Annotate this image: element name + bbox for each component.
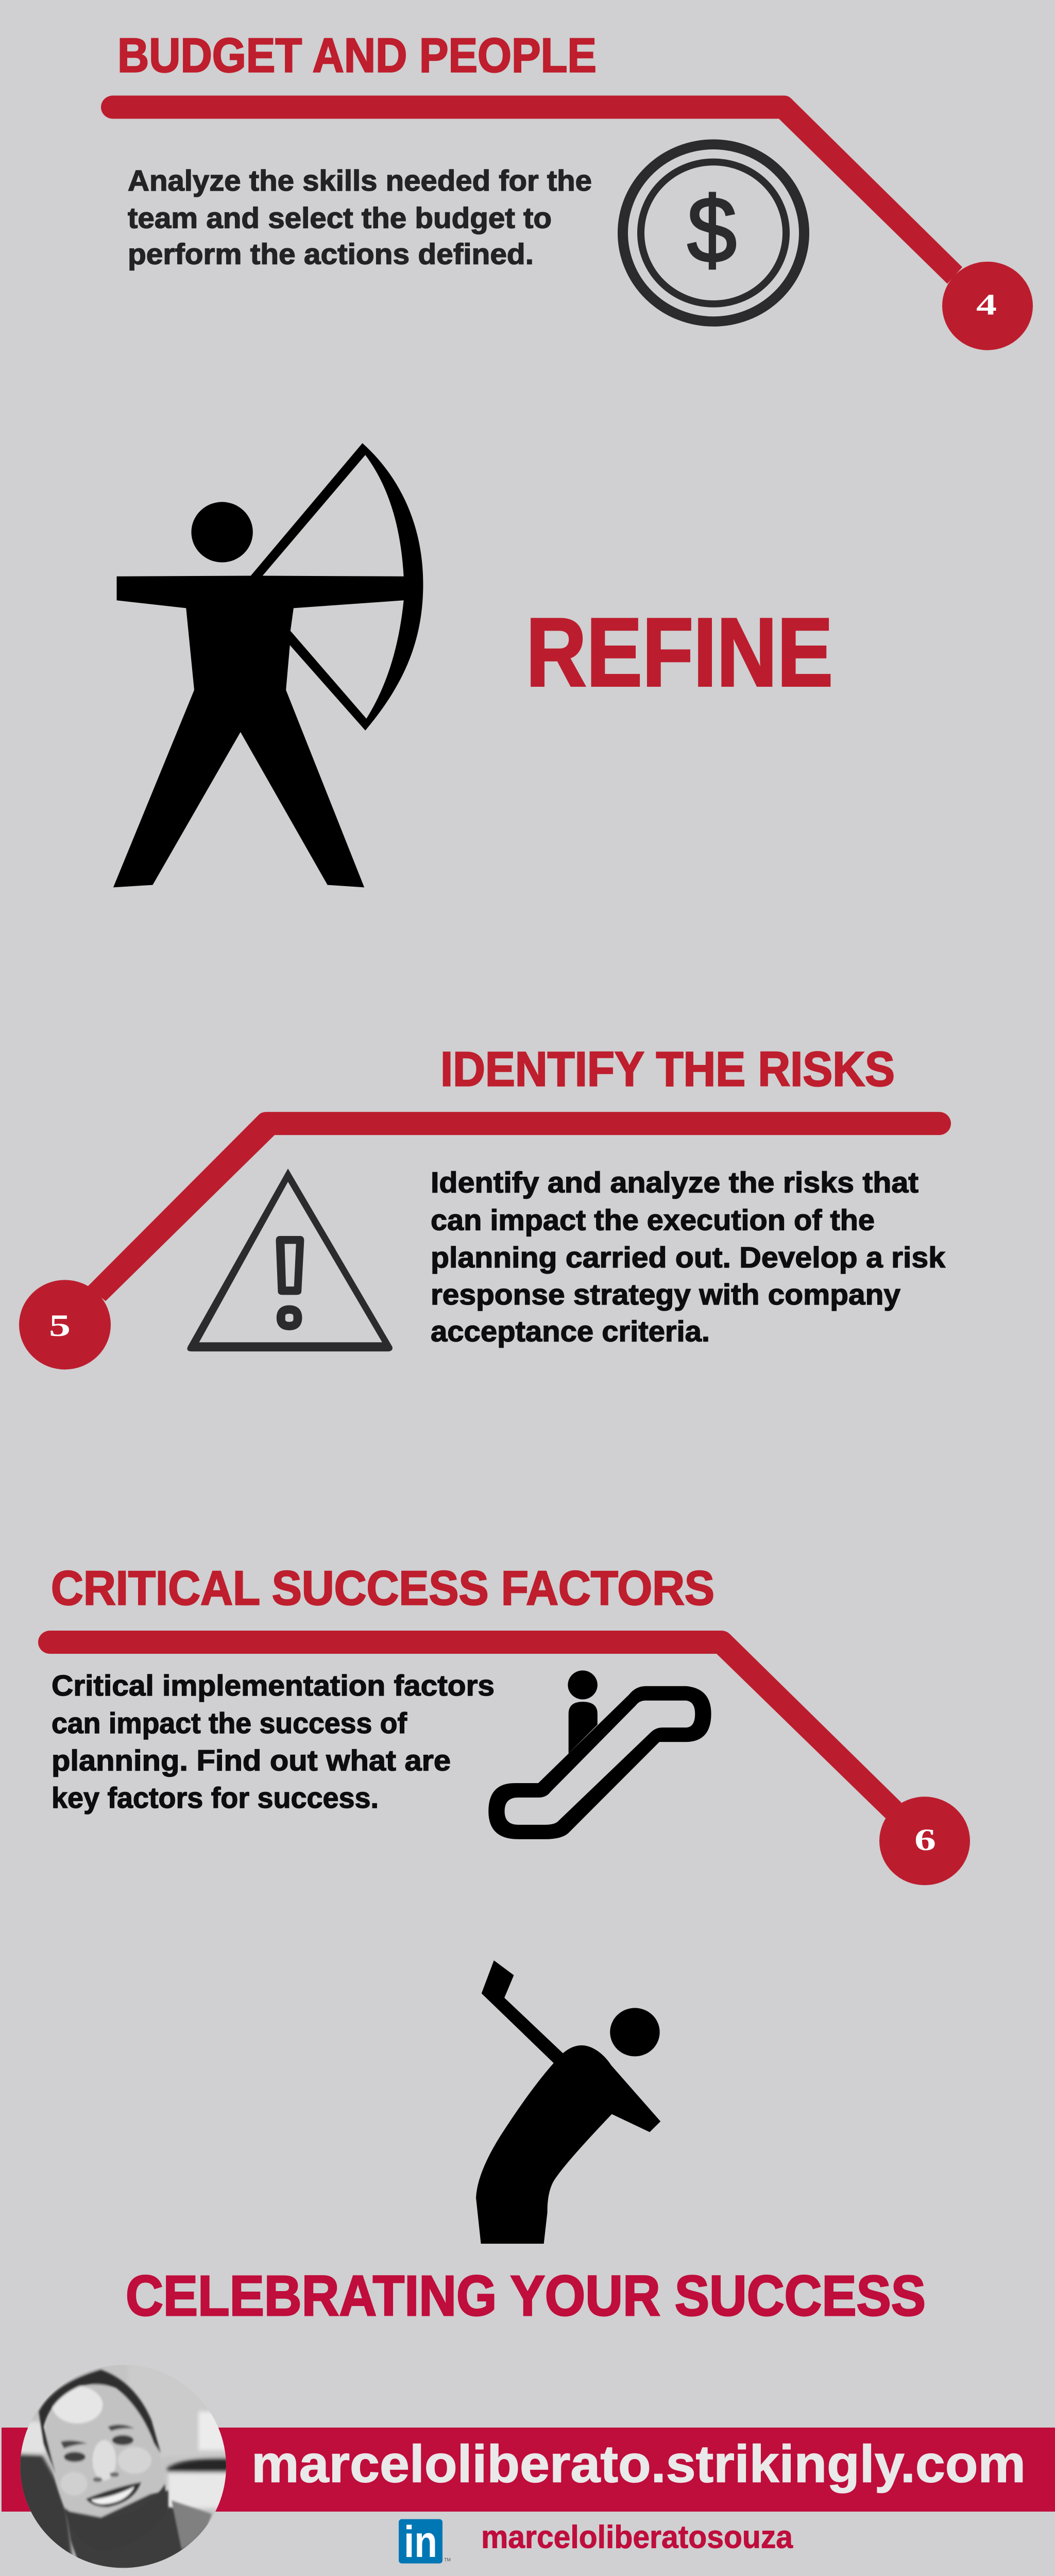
- portrait photo: [17, 2363, 232, 2571]
- body text: critical factors: planning. Find out what are: [52, 1744, 451, 1777]
- icon: person on escalator: [488, 1670, 711, 1839]
- icon: archer with bow: [113, 443, 423, 887]
- body text: critical factors: [52, 1670, 495, 1815]
- footer banner with website address: [2, 2428, 1055, 2512]
- heading: celebrating your success: CELEBRATING YOUR SUCCESS: [126, 2264, 926, 2328]
- icon: dollar coin: $: [687, 178, 737, 282]
- body text: budget: Analyze the skills needed for the: [128, 165, 592, 197]
- heading: critical success factors: CRITICAL SUCCESS FACTORS: [51, 1561, 714, 1615]
- heading: budget and people: BUDGET AND PEOPLE: [117, 29, 597, 82]
- connector line with number badge 6: [38, 1631, 970, 1885]
- icon: linkedin logo: TM: [444, 2557, 451, 2563]
- body text: risks: [431, 1166, 945, 1348]
- icon: linkedin logo: in: [404, 2517, 437, 2567]
- panel: budget and people: [101, 29, 1033, 350]
- connector line with number badge 4: [101, 96, 1033, 350]
- linkedin username: marceloliberatosouza: [481, 2519, 793, 2555]
- connector line with number badge 6: 6: [914, 1822, 936, 1857]
- body text: risks: acceptance criteria.: [431, 1315, 710, 1348]
- body text: risks: response strategy with company: [431, 1279, 900, 1311]
- body text: critical factors: Critical implementation factors: [52, 1670, 495, 1702]
- heading: identify the risks: IDENTIFY THE RISKS: [440, 1042, 895, 1096]
- body text: budget: team and select the budget to: [128, 202, 552, 234]
- body text: budget: perform the actions defined.: [128, 238, 534, 271]
- icon: dollar coin: [623, 144, 804, 321]
- body text: budget: [128, 165, 592, 271]
- connector line with number badge 5: [19, 1112, 951, 1369]
- icon: warning triangle: [187, 1168, 393, 1351]
- heading: refine: REFINE: [526, 598, 833, 707]
- connector line with number badge 4: 4: [976, 287, 997, 321]
- body text: critical factors: key factors for success.: [52, 1782, 379, 1815]
- body text: risks: Identify and analyze the risks that: [431, 1166, 918, 1199]
- body text: risks: can impact the execution of the: [431, 1204, 875, 1237]
- connector line with number badge 5: 5: [49, 1308, 71, 1343]
- panel: critical success factors: [38, 1561, 970, 1885]
- icon: golfer swinging: [476, 1960, 660, 2244]
- panel: identify the risks: [19, 1042, 951, 1369]
- body text: critical factors: can impact the success of: [52, 1707, 407, 1740]
- body text: risks: planning carried out. Develop a risk: [431, 1242, 945, 1274]
- footer banner with website address: marceloliberato.strikingly.com: [251, 2434, 1026, 2493]
